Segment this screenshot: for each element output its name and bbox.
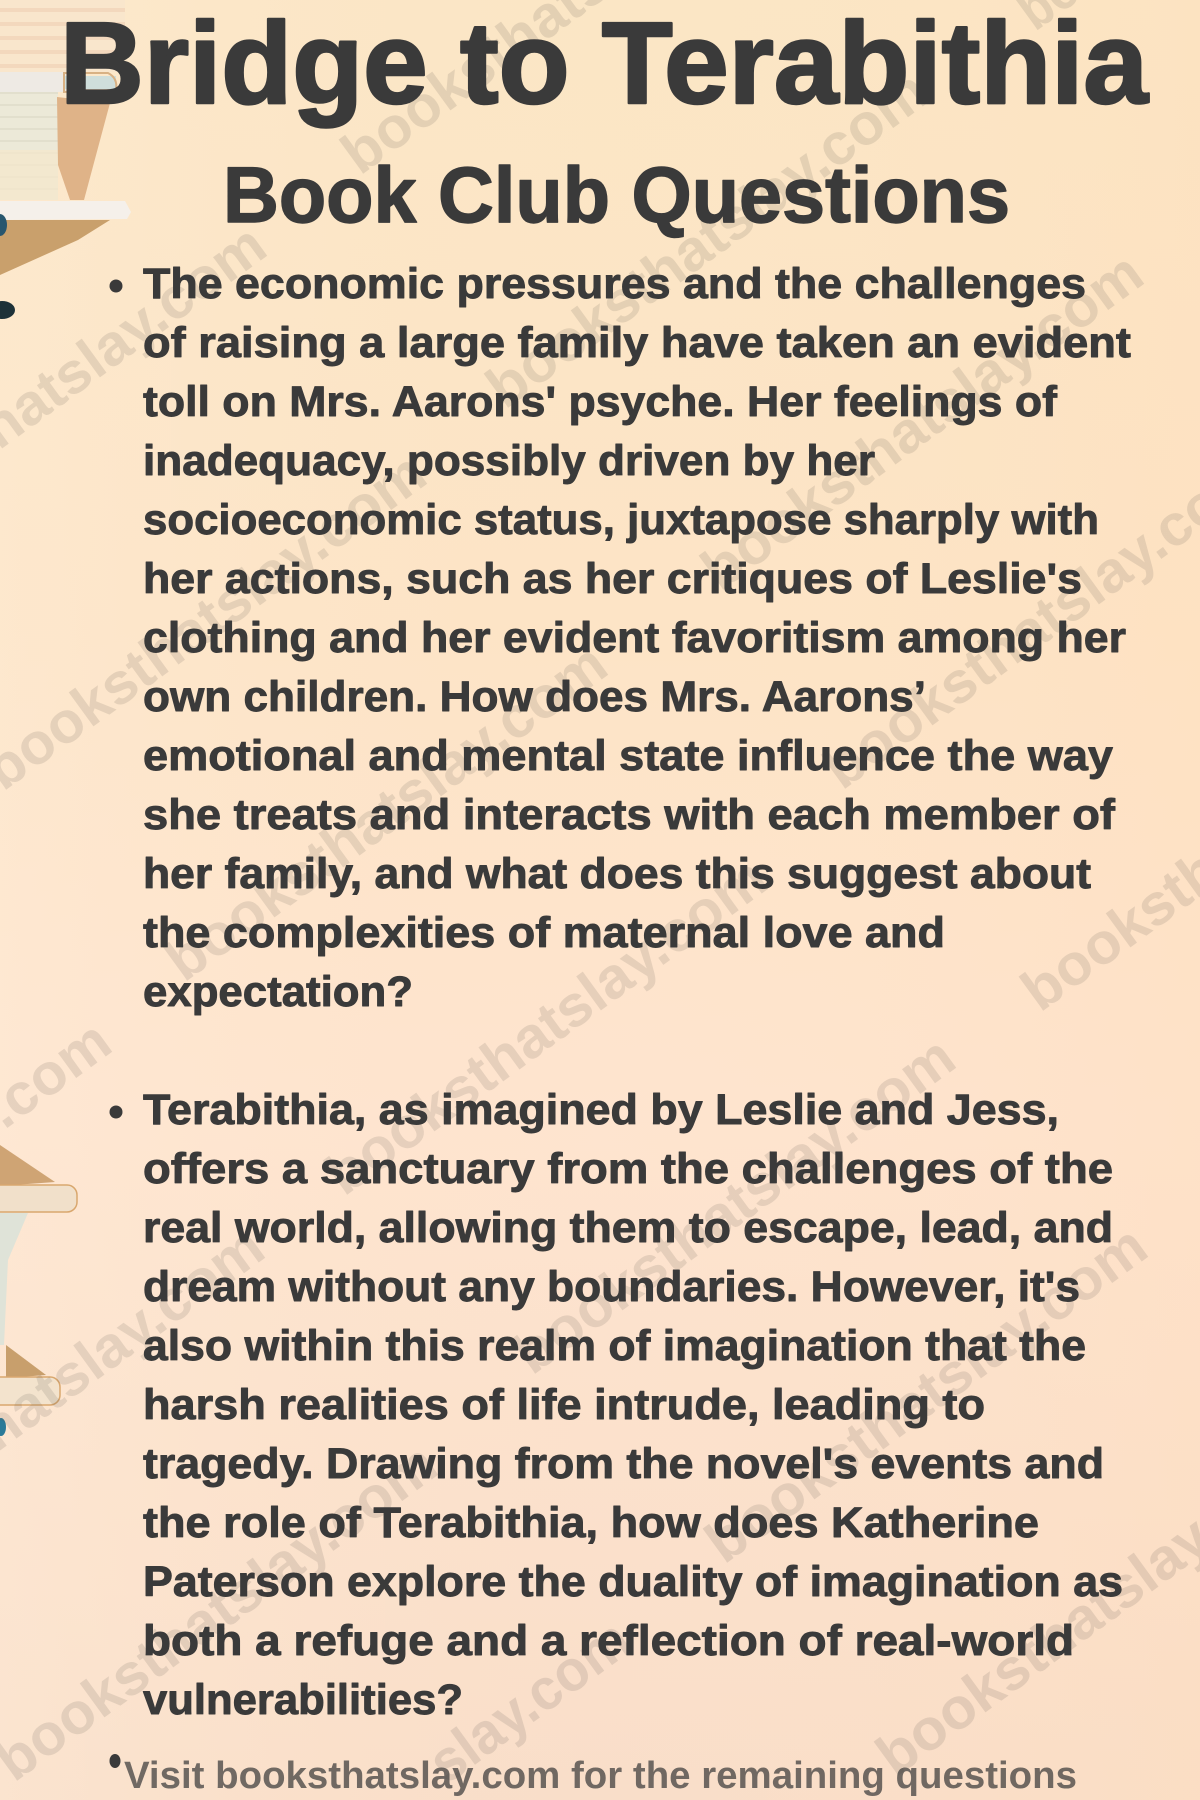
question 1 text xyxy=(143,260,1131,1016)
watermarks: booksthatslay.com xyxy=(313,845,779,1208)
question 1 text: clothing and her evident favoritism among her xyxy=(143,614,1126,662)
question 1 text: toll on Mrs. Aarons' psyche. Her feelings of xyxy=(143,378,1058,426)
question 1 xyxy=(110,260,1131,1016)
question 1 text: expectation? xyxy=(143,968,413,1016)
watermarks: booksthatslay.com xyxy=(693,1213,1159,1576)
question 2 text: dream without any boundaries. However, it's xyxy=(143,1263,1080,1311)
question 1 text: own children. How does Mrs. Aarons’ xyxy=(143,673,926,721)
subtitle: Book Club Questions xyxy=(223,150,1010,239)
question 2 text: harsh realities of life intrude, leading to xyxy=(143,1381,985,1429)
question 1 text: emotional and mental state influence the way xyxy=(143,732,1113,780)
bullet xyxy=(110,1106,122,1118)
question 2 text: Paterson explore the duality of imagination as xyxy=(143,1558,1123,1606)
question 2 text: the role of Terabithia, how does Katherine xyxy=(143,1499,1039,1547)
question 1 text: the complexities of maternal love and xyxy=(143,909,945,957)
watermarks: booksthatslay.com xyxy=(153,631,619,994)
question 2 text: Terabithia, as imagined by Leslie and Jess, xyxy=(143,1086,1059,1134)
question 1 text: her actions, such as her critiques of Leslie's xyxy=(143,555,1082,603)
title: Bridge to Terabithia xyxy=(60,0,1149,128)
question 2 xyxy=(110,1086,1123,1724)
footer bullet xyxy=(110,1754,120,1768)
watermarks: booksthatslay.com xyxy=(689,240,1155,603)
question 2 text: real world, allowing them to escape, lead, and xyxy=(143,1204,1113,1252)
question 1 text: The economic pressures and the challenges xyxy=(143,260,1086,308)
question 2 text: also within this realm of imagination that the xyxy=(143,1322,1086,1370)
question 2 text: both a refuge and a reflection of real-world xyxy=(143,1617,1074,1665)
question 2 text xyxy=(143,1086,1123,1724)
bullet xyxy=(110,280,122,292)
question 1 text: of raising a large family have taken an evident xyxy=(143,319,1131,367)
footer call to action: Visit booksthatslay.com for the remaining questions xyxy=(124,1755,1077,1797)
decorative book stack: middle xyxy=(0,1145,77,1436)
question 2 text: tragedy. Drawing from the novel's events and xyxy=(143,1440,1104,1488)
question 2 text: offers a sanctuary from the challenges of the xyxy=(143,1145,1113,1193)
watermarks: booksthatslay.com xyxy=(501,1024,967,1387)
watermarks: booksthatslay.com xyxy=(474,58,940,421)
watermarks: slay.com xyxy=(416,1607,642,1796)
question 1 text: socioeconomic status, juxtapose sharply with xyxy=(143,496,1099,544)
question 1 text: inadequacy, possibly driven by her xyxy=(143,437,875,485)
question 1 text: her family, and what does this suggest about xyxy=(143,850,1091,898)
decorative book stack: top xyxy=(0,0,131,319)
question 1 text: she treats and interacts with each member of xyxy=(143,791,1116,839)
question 2 text: vulnerabilities? xyxy=(143,1676,463,1724)
